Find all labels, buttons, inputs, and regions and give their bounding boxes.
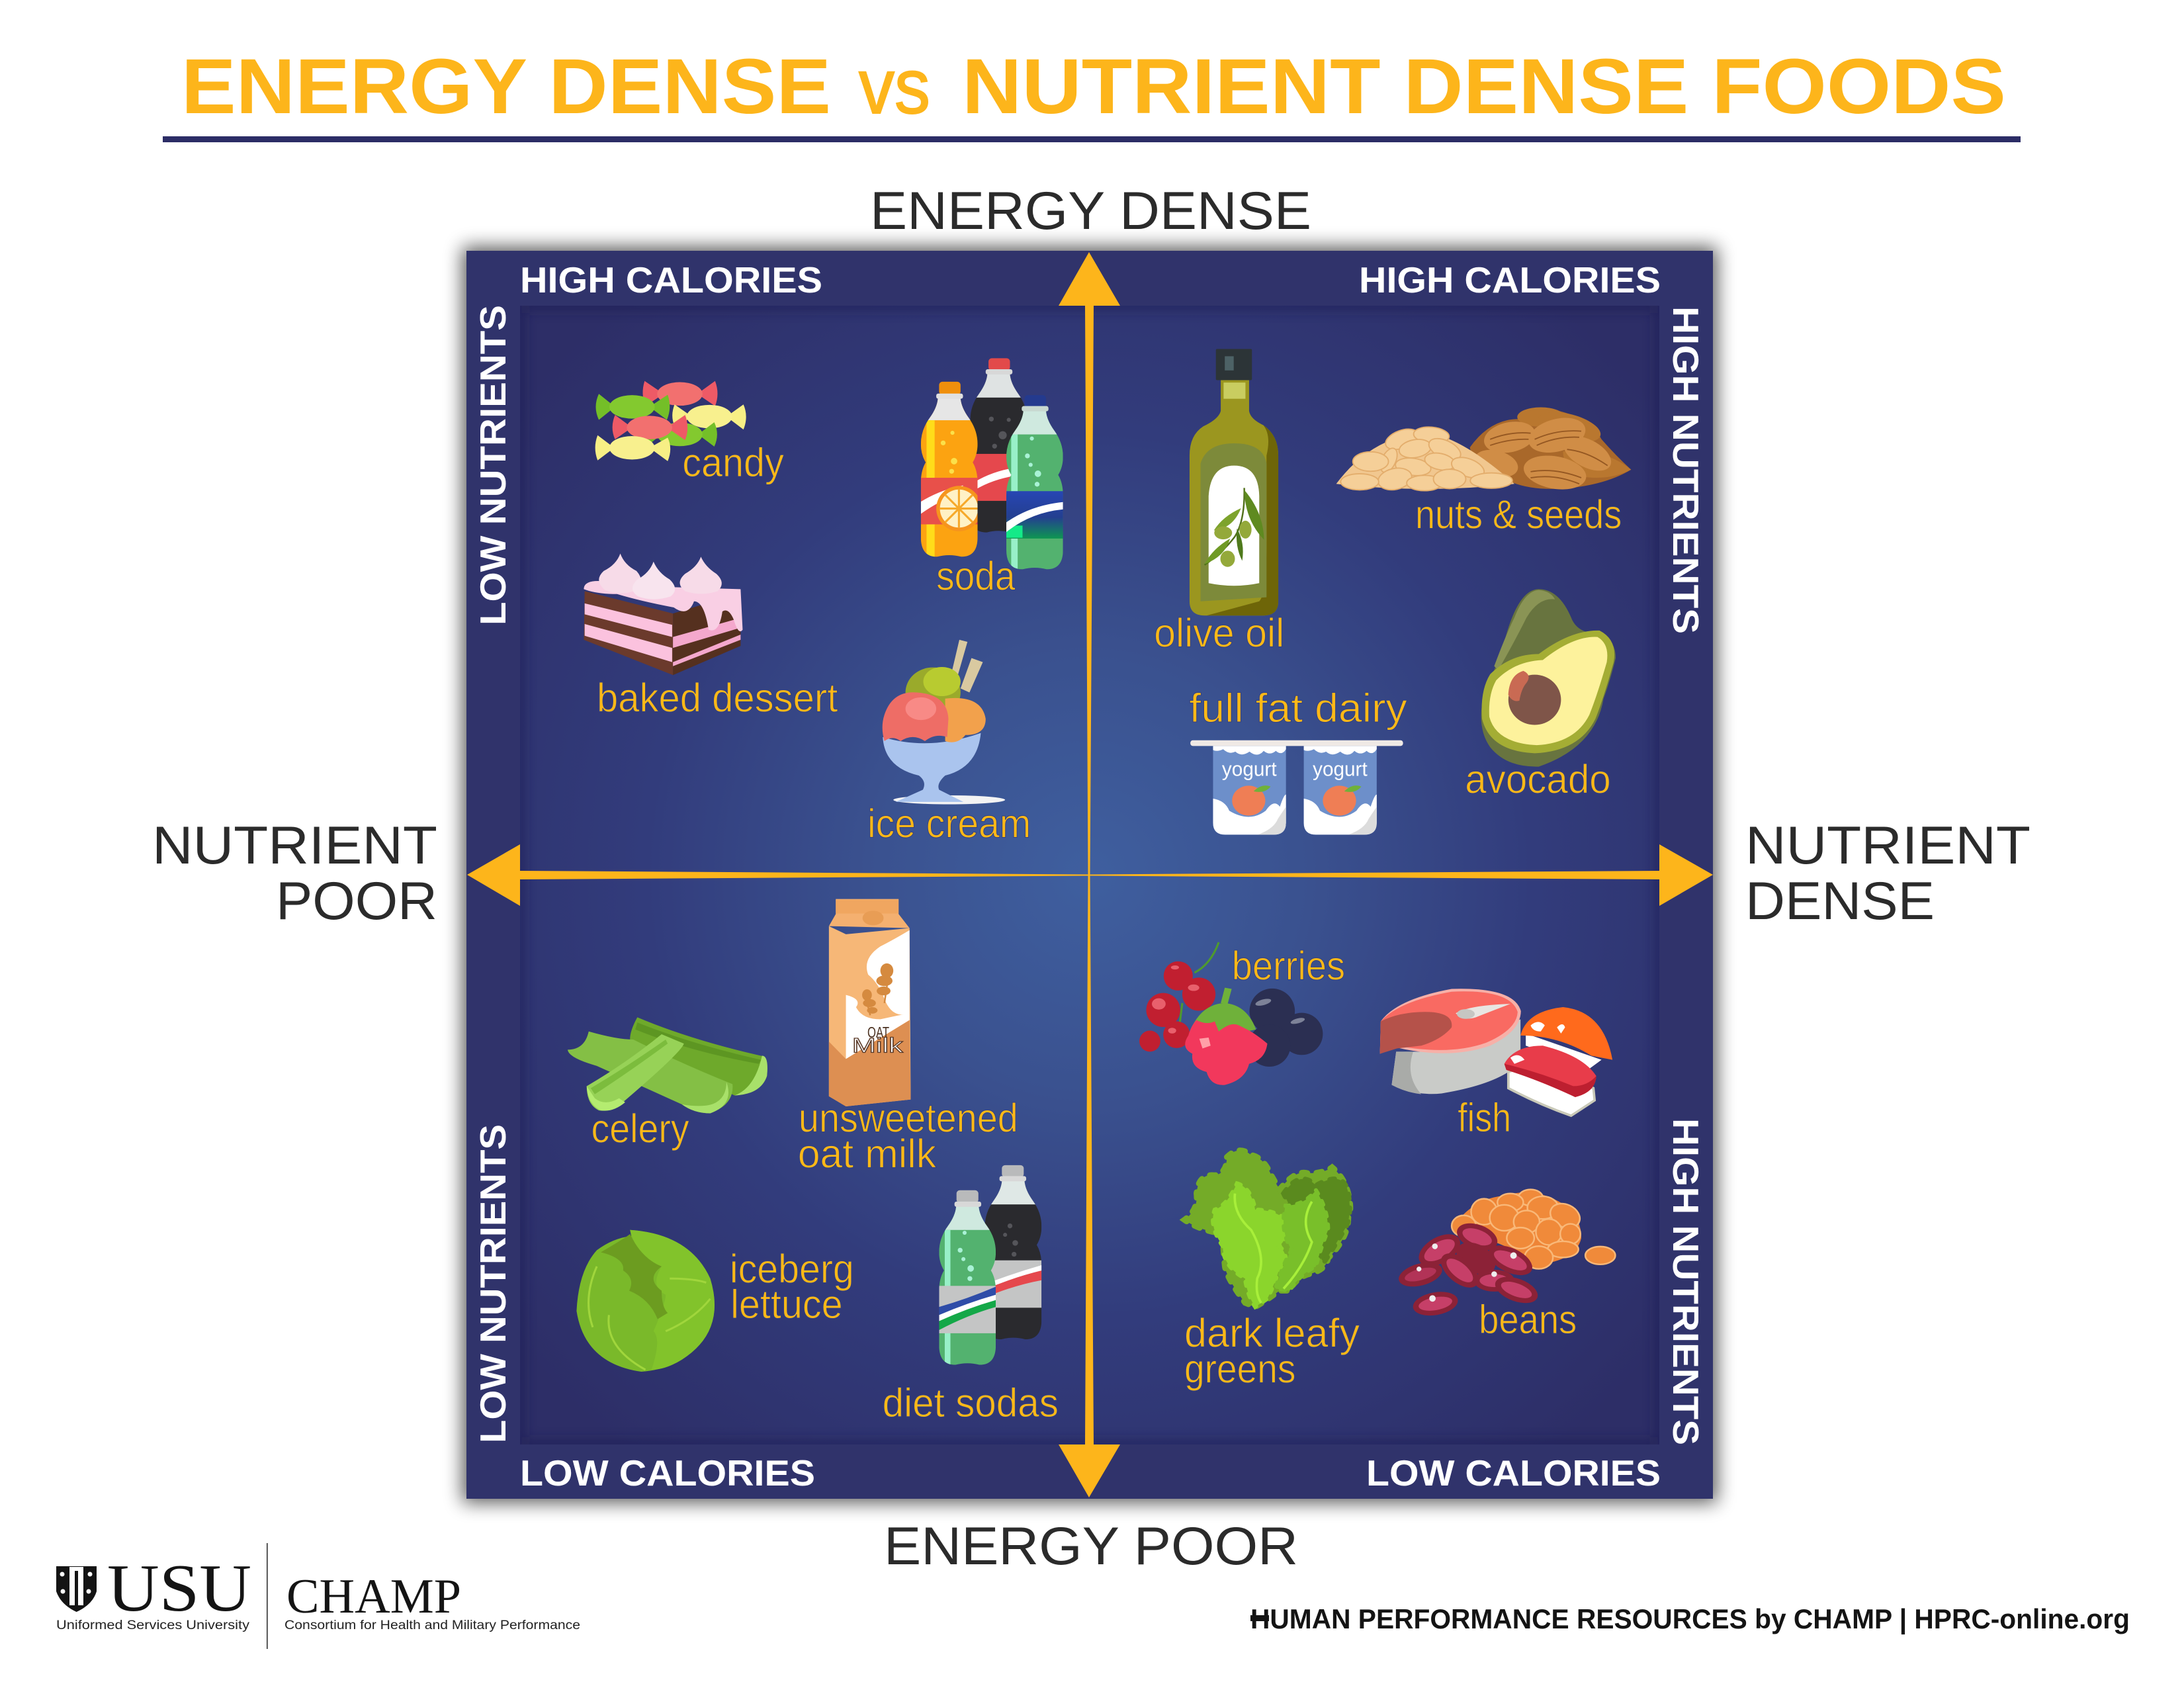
icon: beans [1396, 1190, 1615, 1319]
icon: yogurt cups: yogurt [1222, 758, 1277, 781]
label: full fat dairy: full fat dairy [1189, 686, 1407, 731]
icon: avocado [1481, 589, 1616, 767]
icon: iceberg lettuce [576, 1230, 715, 1372]
frame label: low nutrients top: LOW NUTRIENTS [472, 305, 513, 625]
label: fish: fish [1458, 1095, 1511, 1140]
logo: USU: Uniformed Services University [56, 1619, 250, 1632]
label: beans: beans [1479, 1297, 1577, 1342]
icon: oat milk carton: Milk [852, 1034, 903, 1057]
title: ENERGY DENSE [181, 43, 831, 130]
frame label: low calories right: LOW CALORIES [1366, 1452, 1661, 1493]
label: iceberg lettuce: iceberg [730, 1246, 854, 1291]
title [181, 43, 2006, 130]
icon: yogurt cups: yogurt [1313, 758, 1368, 781]
label: soda: soda [936, 554, 1016, 599]
frame label: high nutrients top: HIGH NUTRIENTS [1665, 306, 1706, 634]
label: unsweetened oat milk [798, 1096, 1018, 1176]
label: berries: berries [1232, 943, 1345, 988]
panel: quadrant chart [462, 247, 1717, 1503]
icon: USU shield [56, 1566, 97, 1612]
arrow: horizontal axis [467, 844, 1713, 906]
label: avocado: avocado [1465, 756, 1611, 801]
logo: CHAMP: Consortium for Health and Military Performance [284, 1619, 580, 1632]
label: diet sodas: diet sodas [883, 1380, 1059, 1425]
footer credit: HUMAN PERFORMANCE RESOURCES by CHAMP | HPRC-online.org [1250, 1603, 2130, 1635]
quadrant: energy dense nutrient dense [1154, 349, 1631, 834]
icon: celery [568, 1017, 767, 1113]
logo: USU [56, 1551, 251, 1632]
title: NUTRIENT DENSE FOODS [962, 43, 2006, 130]
icon: baked dessert [584, 554, 742, 675]
frame label: high calories left: HIGH CALORIES [520, 259, 822, 300]
axis label: energy dense: ENERGY DENSE [870, 181, 1311, 241]
axis label: nutrient dense: NUTRIENT [1745, 816, 2031, 875]
icon: oat milk carton [829, 899, 911, 1106]
icon: dark leafy greens [1184, 1151, 1350, 1307]
icon: olive oil [1190, 349, 1278, 615]
frame label: low nutrients bottom: LOW NUTRIENTS [472, 1124, 513, 1443]
label: iceberg lettuce [730, 1246, 854, 1327]
arrow: vertical axis [1059, 252, 1120, 1497]
label: dark leafy greens: greens [1184, 1347, 1295, 1392]
title: vs [859, 43, 930, 130]
icon: ice cream [883, 640, 1005, 805]
label: unsweetened oat milk: unsweetened [799, 1096, 1018, 1141]
quadrant: energy dense nutrient poor [584, 358, 1063, 846]
icon: oat milk carton: OAT [867, 1024, 889, 1041]
logo: CHAMP: CHAMP [286, 1570, 461, 1624]
label: unsweetened oat milk: oat milk [798, 1131, 936, 1176]
label: ice cream: ice cream [867, 801, 1031, 846]
axis label: nutrient poor: NUTRIENT [152, 816, 437, 875]
icon: berries [1139, 942, 1323, 1085]
frame label: high calories right: HIGH CALORIES [1359, 259, 1661, 300]
axis label: nutrient poor [152, 816, 437, 931]
logo: USU: USU [107, 1551, 251, 1626]
axis label: nutrient dense: DENSE [1745, 871, 1935, 931]
axis label: nutrient dense [1745, 816, 2031, 931]
axis label: nutrient poor: POOR [276, 871, 437, 931]
icon: nuts and seeds [1336, 406, 1631, 494]
icon: soda bottles [921, 358, 1063, 570]
icon: fish [1380, 989, 1612, 1116]
icon: diet sodas [939, 1165, 1041, 1366]
icon: candy [595, 381, 746, 461]
label: candy: candy [682, 440, 784, 485]
label: dark leafy greens: dark leafy [1184, 1311, 1360, 1356]
label: iceberg lettuce: lettuce [730, 1282, 843, 1327]
label: nuts and seeds: nuts & seeds [1415, 492, 1622, 537]
label: dark leafy greens [1184, 1311, 1360, 1392]
label: olive oil: olive oil [1154, 610, 1284, 655]
frame label: high nutrients bottom: HIGH NUTRIENTS [1665, 1118, 1706, 1445]
icon: yogurt cups [1190, 740, 1403, 834]
quadrant: energy poor nutrient dense [1139, 942, 1615, 1392]
quadrant: energy poor nutrient poor [568, 899, 1059, 1425]
logo: CHAMP [284, 1570, 580, 1632]
frame label: low calories left: LOW CALORIES [520, 1452, 815, 1493]
label: baked dessert: baked dessert [597, 675, 838, 720]
axis label: energy poor: ENERGY POOR [884, 1517, 1298, 1576]
label: celery: celery [591, 1106, 689, 1151]
